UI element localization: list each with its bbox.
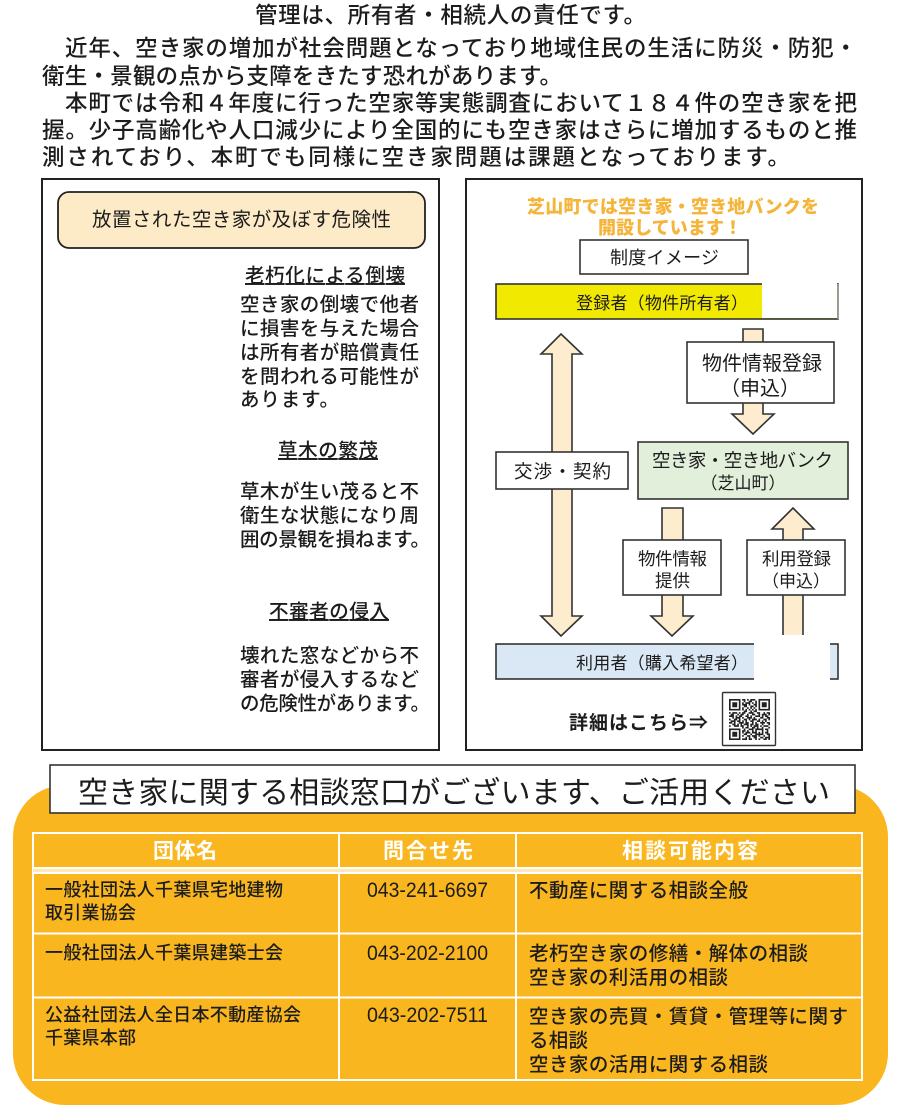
row: architects association: 一般社団法人千葉県建築士会	[45, 943, 283, 963]
section: collapse: あります。	[240, 389, 339, 411]
bank heading: 芝山町では空き家・空き地バンクを	[527, 197, 819, 217]
arrow: information provision	[651, 508, 693, 636]
registrant bar	[496, 282, 838, 319]
user registration box: 利用登録	[762, 549, 832, 569]
diagram title box	[580, 240, 748, 274]
panel: vacant house bank	[466, 179, 862, 750]
intro text	[42, 3, 857, 170]
details link text: 詳細はこちら⇒	[569, 711, 708, 734]
information provision box: 物件情報	[638, 549, 707, 569]
row: architects association: 空き家の利活用の相談	[529, 967, 728, 989]
row: architects association	[45, 942, 808, 989]
row: takken association: 043-241-6697	[367, 879, 488, 902]
section: collapse: 空き家の倒壊で他者	[240, 294, 419, 316]
section: collapse: 老朽化による倒壊	[245, 265, 405, 287]
section: intruders	[240, 601, 430, 715]
table header	[153, 840, 758, 863]
row: takken association	[45, 879, 748, 923]
information provision box	[623, 540, 721, 595]
bank heading	[527, 197, 819, 238]
row: real estate association: 空き家の活用に関する相談	[529, 1054, 768, 1076]
section: collapse: は所有者が賠償責任	[240, 342, 419, 364]
intro text: 管理は、所有者・相続人の責任です。	[255, 3, 646, 28]
section: collapse	[240, 265, 419, 411]
bank box	[638, 442, 848, 499]
row: real estate association: 043-202-7511	[367, 1004, 488, 1027]
intro text: 衛生・景観の点から支障をきたす恐れがあります。	[42, 64, 562, 89]
row: real estate association	[45, 1004, 848, 1076]
property registration box: （申込）	[720, 377, 800, 400]
section: overgrown vegetation: 草木の繁茂	[278, 440, 378, 462]
intro text: 近年、空き家の増加が社会問題となっており地域住民の生活に防災・防犯・	[65, 36, 857, 61]
user bar	[496, 635, 838, 682]
section: overgrown vegetation: 衛生な状態になり周	[240, 505, 419, 527]
property registration box	[687, 342, 834, 403]
row: real estate association: 千葉県本部	[45, 1028, 136, 1048]
section: overgrown vegetation: 囲の景観を損ねます。	[240, 529, 430, 551]
panel heading	[58, 192, 425, 248]
user registration box	[747, 540, 845, 595]
row: architects association: 043-202-2100	[367, 942, 488, 965]
negotiation box	[496, 452, 628, 489]
registrant bar: 登録者（物件所有者）	[576, 294, 748, 313]
row: takken association: 不動産に関する相談全般	[529, 880, 748, 902]
information provision box: 提供	[655, 571, 690, 591]
bank heading: 開設しています！	[598, 218, 742, 238]
bank box: 空き家・空き地バンク	[652, 450, 833, 471]
table header: 問合せ先	[383, 840, 473, 863]
property registration box: 物件情報登録	[702, 352, 822, 375]
arrow: negotiation two-way	[541, 334, 582, 636]
section: intruders: 不審者の侵入	[269, 601, 389, 623]
section: overgrown vegetation	[240, 440, 430, 551]
consultation title	[50, 765, 855, 813]
arrow: user registration	[772, 508, 814, 640]
bank box: （芝山町）	[700, 474, 786, 493]
icon: QR code	[722, 692, 776, 746]
arrow: property registration	[732, 329, 774, 434]
row: takken association: 一般社団法人千葉県宅地建物	[45, 880, 283, 900]
consultation table	[33, 833, 862, 1080]
user bar: 利用者（購入希望者）	[576, 654, 748, 673]
section: intruders: の危険性があります。	[240, 693, 430, 715]
row: takken association: 取引業協会	[45, 903, 136, 923]
row: real estate association: 空き家の売買・賃貸・管理等に関す	[529, 1006, 848, 1028]
diagram title box: 制度イメージ	[610, 248, 719, 268]
row: architects association: 老朽空き家の修繕・解体の相談	[529, 943, 808, 965]
intro text: 測されており、本町でも同様に空き家問題は課題となっております。	[42, 145, 790, 170]
panel: dangers of abandoned houses	[42, 179, 439, 750]
intro text: 握。少子高齢化や人口減少により全国的にも空き家はさらに増加するものと推	[42, 118, 857, 143]
consultation panel background	[13, 785, 888, 1105]
negotiation box: 交渉・契約	[514, 461, 611, 482]
table header: 相談可能内容	[622, 840, 758, 863]
section: intruders: 壊れた窓などから不	[240, 645, 419, 667]
row: real estate association: る相談	[529, 1030, 588, 1052]
section: intruders: 審者が侵入するなど	[240, 669, 419, 691]
section: overgrown vegetation: 草木が生い茂ると不	[240, 481, 419, 503]
table header: 団体名	[153, 840, 217, 863]
consultation title: 空き家に関する相談窓口がございます、ご活用ください	[78, 777, 830, 810]
panel heading: 放置された空き家が及ぼす危険性	[92, 209, 391, 231]
user registration box: （申込）	[762, 572, 830, 591]
row: real estate association: 公益社団法人全日本不動産協会	[45, 1005, 301, 1025]
section: collapse: に損害を与えた場合	[240, 318, 419, 340]
section: collapse: を問われる可能性が	[240, 366, 419, 388]
intro text: 本町では令和４年度に行った空家等実態調査において１８４件の空き家を把	[65, 91, 857, 116]
